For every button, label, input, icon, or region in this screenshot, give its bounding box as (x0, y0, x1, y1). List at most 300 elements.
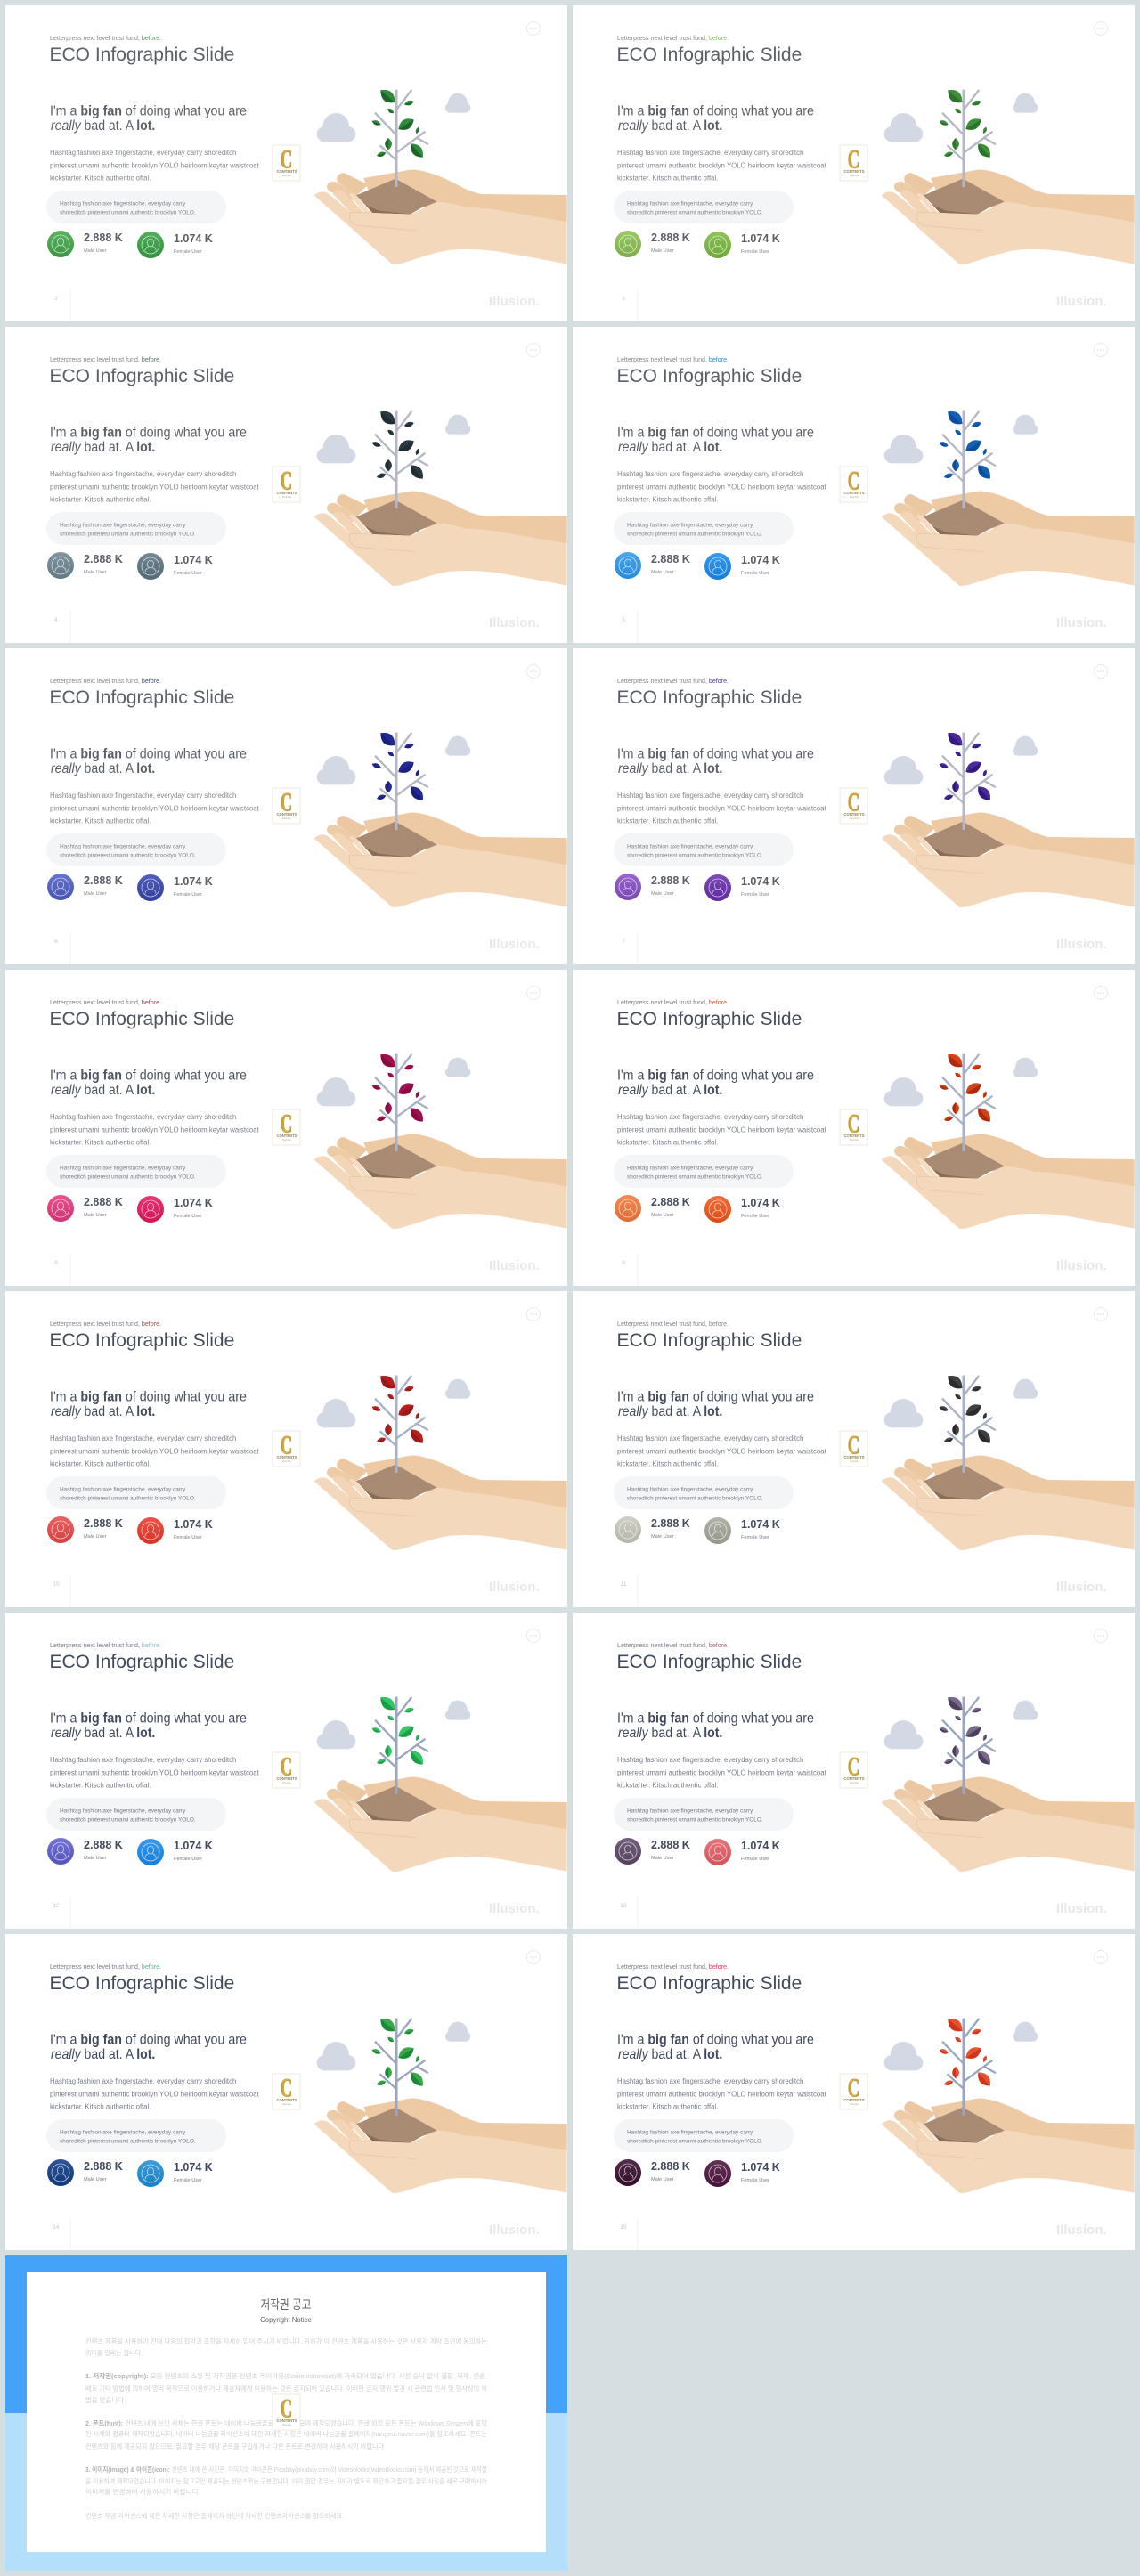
callout pill: shoreditch pinterest umami authentic brooklyn YOLO. (627, 210, 763, 215)
panel: slide 7 (573, 648, 1135, 964)
stat: female users: Female User (741, 1214, 770, 1219)
stat: female users (704, 553, 780, 580)
body text (50, 1756, 260, 1790)
footer divider (69, 289, 71, 321)
white notice sheet (27, 2272, 546, 2552)
body text: Hashtag fashion axe fingerstache, everyday carry shoreditch (617, 1113, 803, 1121)
illustration: sapling (940, 1697, 995, 1794)
small heading: Letterpress next level trust fund, before. (617, 35, 729, 42)
slide background (5, 648, 567, 964)
logo: Real.Star (850, 1782, 859, 1784)
body text (50, 1434, 260, 1467)
callout pill: Hashtag fashion axe fingerstache, everyday carry (627, 2130, 753, 2135)
stat: male users: Male User (84, 891, 107, 897)
headline: I'm a big fan of doing what you are (617, 1068, 814, 1084)
footer divider (637, 1254, 639, 1286)
logo: CONTENTS (276, 491, 297, 495)
callout pill: Hashtag fashion axe fingerstache, everyday carry (627, 1487, 753, 1492)
logo: CONTENTS (276, 169, 297, 174)
callout pill (46, 2119, 226, 2152)
notice title: 저작권 공고 (260, 2297, 312, 2312)
slide background (573, 1613, 1135, 1929)
stat: male users: 2.888 K (651, 2160, 690, 2173)
icon: menu dots (527, 664, 540, 679)
icon: clouds (317, 1701, 470, 1749)
logo: CONTENTS (843, 491, 865, 495)
illustration: sapling (940, 1054, 995, 1151)
title: ECO Infographic Slide (50, 1973, 234, 1994)
headline (617, 1389, 814, 1419)
stat: female users: 1.074 K (741, 875, 780, 888)
logo: Real.Star (850, 817, 859, 820)
icon: clouds (884, 1058, 1038, 1106)
font clause: 컨텐츠와 함께 제공되지 않으므로, 필요할 경우 해당 폰트를 구입하거나 다른 폰트로 변경하여 사용하시기 바랍니다. (86, 2442, 386, 2450)
stat: male users: Male User (84, 1534, 107, 1540)
footer divider (69, 932, 71, 964)
page number: 15 (620, 2224, 627, 2231)
stat: male users: 2.888 K (84, 1839, 123, 1851)
page number: 11 (621, 1581, 627, 1588)
brand mark: Illusion. (489, 1580, 540, 1595)
panel: slide 8 (5, 970, 567, 1286)
body text: pinterest umami authentic brooklyn YOLO heirloom keytar waistcoat (617, 1768, 827, 1777)
stat: female users: Female User (741, 1857, 770, 1862)
copyright clause (86, 2371, 487, 2404)
logo (840, 467, 867, 502)
stat: male users: Male User (651, 248, 674, 254)
logo (840, 1109, 867, 1145)
logo: C (848, 467, 859, 496)
icon: menu dots (527, 987, 540, 999)
body text: Hashtag fashion axe fingerstache, everyday carry shoreditch (50, 792, 236, 800)
headline: really bad at. A lot. (618, 439, 722, 455)
stat: female users: Female User (174, 1535, 202, 1540)
title: ECO Infographic Slide (50, 45, 234, 65)
illustration: hands with soil (314, 491, 567, 586)
slide background (5, 970, 567, 1286)
illustration: sapling (372, 733, 428, 830)
page number: 12 (53, 1903, 60, 1909)
headline (617, 103, 814, 134)
stat: male users: 2.888 K (84, 553, 123, 565)
panel: slide 10 (5, 1291, 567, 1607)
logo: C (281, 788, 292, 817)
headline: I'm a big fan of doing what you are (50, 1068, 247, 1084)
small heading: Letterpress next level trust fund, before. (617, 678, 729, 685)
callout pill: shoreditch pinterest umami authentic brooklyn YOLO. (60, 1496, 196, 1501)
illustration: sapling (372, 1376, 428, 1473)
body text (617, 792, 827, 825)
callout pill (614, 191, 794, 223)
icon: menu dots (527, 1629, 540, 1642)
headline (50, 2032, 247, 2062)
illustration: hands with soil (314, 1455, 567, 1550)
callout pill (46, 1155, 226, 1188)
icon: menu dots (1094, 1307, 1108, 1321)
stat: male users (47, 552, 123, 579)
callout pill: shoreditch pinterest umami authentic brooklyn YOLO. (60, 853, 196, 858)
footer divider (69, 1575, 71, 1607)
footer divider (637, 932, 639, 964)
logo (840, 788, 867, 824)
callout pill (46, 191, 226, 223)
title: ECO Infographic Slide (50, 366, 234, 386)
headline: I'm a big fan of doing what you are (50, 103, 247, 119)
stat: female users (704, 1839, 780, 1865)
stat: male users (615, 874, 690, 900)
illustration: hands with soil (314, 2098, 567, 2193)
callout pill: shoreditch pinterest umami authentic brooklyn YOLO. (627, 1816, 763, 1824)
illustration: hands with soil (314, 812, 567, 907)
body text: Hashtag fashion axe fingerstache, everyday carry shoreditch (617, 2077, 803, 2085)
footer divider (637, 611, 639, 643)
illustration: hands with soil (314, 169, 567, 264)
page number: 4 (54, 617, 58, 623)
headline: I'm a big fan of doing what you are (617, 746, 814, 762)
stat: male users: Male User (84, 248, 107, 254)
stat: male users (615, 2159, 690, 2186)
callout pill: shoreditch pinterest umami authentic brooklyn YOLO. (60, 1174, 196, 1181)
stat: female users: Female User (174, 571, 202, 576)
logo (840, 2074, 867, 2109)
callout pill: Hashtag fashion axe fingerstache, everyday carry (60, 1487, 186, 1492)
body text: kickstarter. Kitsch authentic offal. (50, 175, 151, 182)
page number: 14 (53, 2224, 60, 2231)
stat: female users: Female User (741, 892, 770, 898)
stat: male users: Male User (651, 570, 674, 575)
body text: Hashtag fashion axe fingerstache, everyday carry shoreditch (617, 1756, 803, 1764)
image and icon clause: 이미지를 변경하여 사용하시기 바랍니다. (86, 2487, 200, 2496)
callout pill: Hashtag fashion axe fingerstache, everyday carry (60, 1165, 186, 1172)
illustration: hands with soil (314, 1134, 567, 1229)
stat: female users (137, 1839, 213, 1865)
stat: male users: 2.888 K (651, 1196, 690, 1208)
callout pill: Hashtag fashion axe fingerstache, everyday carry (60, 522, 186, 529)
body text: kickstarter. Kitsch authentic offal. (617, 1460, 718, 1467)
logo (840, 1752, 867, 1788)
icon: menu dots (527, 21, 540, 36)
body text: pinterest umami authentic brooklyn YOLO heirloom keytar waistcoat (617, 2091, 827, 2098)
brand mark: Illusion. (1056, 615, 1107, 630)
image and icon clause: 3. 이미지(image) & 아이콘(icon): 컨텐츠 내에 쓴 사진은, 이미지와 아이콘은 Pixabay(pixabay.com)와 Videoblocks(videoblocks.com) 등에서 제공된 것으로 제작물 (86, 2465, 487, 2474)
stat: female users: 1.074 K (741, 1518, 780, 1531)
logo (840, 145, 867, 181)
callout pill: Hashtag fashion axe fingerstache, everyday carry (60, 2130, 186, 2135)
brand mark: Illusion. (1056, 2223, 1107, 2238)
illustration: sapling (940, 2019, 995, 2116)
illustration: sapling (940, 733, 995, 830)
headline (617, 746, 814, 776)
font clause: 2. 폰트(font): 컨텐츠 내에 쓰인 서체는 한글 폰트는 네이버 나눔글꼴로 제작되었으며 제작되었습니다. 한글 외의 모든 폰트는 Windows System에 포함 (86, 2418, 487, 2427)
illustration: sapling (372, 90, 428, 187)
headline: really bad at. A lot. (51, 439, 155, 455)
logo: Real.Star (850, 1139, 859, 1142)
callout pill (46, 512, 226, 545)
illustration: sapling (940, 1376, 995, 1473)
logo: CONTENTS (276, 812, 297, 817)
logo: C (281, 1431, 292, 1460)
brand mark: Illusion. (1056, 1901, 1107, 1916)
logo: Real.Star (850, 175, 859, 177)
title: ECO Infographic Slide (616, 1652, 802, 1672)
body text (50, 792, 260, 825)
brand mark: Illusion. (1056, 937, 1107, 952)
headline: really bad at. A lot. (51, 1725, 155, 1741)
headline: I'm a big fan of doing what you are (617, 2032, 814, 2048)
illustration: sapling (372, 2019, 428, 2116)
headline: I'm a big fan of doing what you are (617, 1711, 814, 1727)
body text (617, 1113, 827, 1147)
body text: pinterest umami authentic brooklyn YOLO heirloom keytar waistcoat (617, 1448, 827, 1455)
image and icon clause: 을 이용하여 제작되었습니다. 이미지는 참고교안 제공되는 컨텐츠와는 구분합니다. 이미 결합 경우는 귀하가 별도로 확인하고 필요할 경우 사진을 새로 구매하시어 (86, 2476, 487, 2485)
logo: Real.Star (282, 817, 291, 820)
body text: Hashtag fashion axe fingerstache, everyday carry shoreditch (50, 149, 236, 157)
logo (840, 1431, 867, 1467)
headline: really bad at. A lot. (618, 760, 722, 776)
headline: really bad at. A lot. (618, 2046, 722, 2062)
stat: male users (47, 231, 123, 257)
body text: kickstarter. Kitsch authentic offal. (50, 817, 151, 825)
stat: female users (137, 874, 213, 901)
stat: male users: 2.888 K (84, 232, 123, 244)
body text: pinterest umami authentic brooklyn YOLO heirloom keytar waistcoat (50, 805, 260, 812)
footer divider (69, 1254, 71, 1286)
body text (50, 470, 260, 504)
small heading: Letterpress next level trust fund, before. (617, 1321, 729, 1328)
footer divider (69, 1897, 71, 1929)
logo: Real.Star (282, 175, 291, 177)
headline: really bad at. A lot. (618, 118, 722, 134)
body text: Hashtag fashion axe fingerstache, everyday carry shoreditch (50, 2077, 236, 2085)
body text: pinterest umami authentic brooklyn YOLO heirloom keytar waistcoat (617, 483, 827, 492)
slide background (573, 5, 1135, 321)
callout pill: shoreditch pinterest umami authentic brooklyn YOLO. (60, 531, 196, 538)
stat: male users: 2.888 K (84, 2160, 123, 2173)
stat: male users: 2.888 K (84, 1196, 123, 1208)
headline (617, 425, 814, 455)
illustration: sapling (372, 1697, 428, 1794)
stat: male users (47, 1838, 123, 1865)
small heading: Letterpress next level trust fund, before. (617, 999, 729, 1006)
stat: male users: Male User (84, 1856, 107, 1861)
callout pill: shoreditch pinterest umami authentic brooklyn YOLO. (627, 531, 763, 538)
font clause (86, 2418, 487, 2450)
callout pill: shoreditch pinterest umami authentic brooklyn YOLO. (60, 210, 196, 215)
blue header band (5, 2255, 567, 2413)
body text: kickstarter. Kitsch authentic offal. (617, 817, 718, 825)
stat: male users (615, 1838, 690, 1865)
stat: male users: 2.888 K (84, 874, 123, 887)
logo: CONTENTS (843, 2098, 865, 2102)
body text: pinterest umami authentic brooklyn YOLO heirloom keytar waistcoat (617, 805, 827, 812)
logo: C (848, 1431, 859, 1460)
headline: I'm a big fan of doing what you are (617, 425, 814, 441)
small heading: Letterpress next level trust fund, before. (50, 678, 161, 685)
stat: female users (704, 1196, 780, 1223)
callout pill (46, 1476, 226, 1509)
headline: really bad at. A lot. (618, 1082, 722, 1098)
stat: female users: 1.074 K (741, 2161, 780, 2174)
small heading: Letterpress next level trust fund, before. (50, 1642, 161, 1649)
title: ECO Infographic Slide (616, 1009, 802, 1029)
callout pill: shoreditch pinterest umami authentic brooklyn YOLO. (60, 2139, 196, 2144)
illustration: sapling (372, 1054, 428, 1151)
logo: CONTENTS (276, 1776, 297, 1781)
headline: I'm a big fan of doing what you are (50, 1711, 247, 1727)
body text: Hashtag fashion axe fingerstache, everyday carry shoreditch (50, 1756, 236, 1764)
callout pill (614, 1155, 794, 1188)
logo: CONTENTS (276, 2418, 297, 2423)
logo: Real.Star (282, 1460, 291, 1463)
logo: C (848, 145, 859, 175)
illustration: hands with soil (882, 1455, 1135, 1550)
stat: male users: 2.888 K (651, 1839, 690, 1851)
body text: pinterest umami authentic brooklyn YOLO heirloom keytar waistcoat (617, 1125, 827, 1134)
page number: 3 (622, 296, 625, 302)
panel: copyright notice (5, 2255, 567, 2571)
light blue lower band (5, 2413, 567, 2571)
stat: male users: Male User (651, 2177, 674, 2182)
footer divider (637, 1897, 639, 1929)
stat: female users (137, 2160, 213, 2187)
body text (617, 1756, 827, 1790)
body text: pinterest umami authentic brooklyn YOLO heirloom keytar waistcoat (50, 483, 260, 492)
stat: female users: 1.074 K (741, 554, 780, 566)
brand mark: Illusion. (489, 2223, 540, 2238)
stat: male users (47, 1516, 123, 1543)
headline: really bad at. A lot. (51, 1082, 155, 1098)
brand mark: Illusion. (489, 1901, 540, 1916)
icon: menu dots (1094, 1950, 1108, 1964)
icon: menu dots (1094, 344, 1108, 356)
logo: C (848, 788, 859, 817)
stat: male users (615, 231, 690, 257)
logo: CONTENTS (843, 812, 865, 817)
logo: Real.Star (282, 2424, 291, 2426)
logo: CONTENTS (843, 169, 865, 174)
logo: C (848, 1109, 859, 1139)
callout pill: Hashtag fashion axe fingerstache, everyday carry (627, 522, 753, 529)
headline: really bad at. A lot. (618, 1725, 722, 1741)
stat: female users: 1.074 K (174, 1840, 213, 1852)
stat: female users: 1.074 K (174, 232, 213, 245)
icon: clouds (317, 2022, 470, 2070)
body text: Hashtag fashion axe fingerstache, everyday carry shoreditch (50, 470, 236, 478)
callout pill (614, 512, 794, 545)
logo: Real.Star (850, 1460, 859, 1463)
body text (50, 2077, 260, 2110)
logo (273, 2074, 300, 2109)
icon: clouds (317, 93, 470, 142)
stat: male users: 2.888 K (651, 232, 690, 244)
title: ECO Infographic Slide (616, 1973, 802, 1994)
logo: Real.Star (850, 2103, 859, 2106)
slide background (5, 5, 567, 321)
page number: 9 (622, 1260, 625, 1266)
stat: male users: 2.888 K (84, 1517, 123, 1530)
body text: kickstarter. Kitsch authentic offal. (50, 1781, 151, 1790)
headline: really bad at. A lot. (51, 2046, 155, 2062)
panel: slide 11 (573, 1291, 1135, 1607)
intro paragraph: 의미를 알리는 합니다. (86, 2348, 142, 2357)
icon: clouds (317, 415, 470, 463)
stat: male users (615, 1195, 690, 1222)
body text: pinterest umami authentic brooklyn YOLO heirloom keytar waistcoat (617, 162, 827, 169)
slide background (573, 1934, 1135, 2250)
headline: really bad at. A lot. (51, 1403, 155, 1419)
logo (273, 2394, 300, 2430)
illustration: hands with soil (314, 1776, 567, 1872)
body text: pinterest umami authentic brooklyn YOLO heirloom keytar waistcoat (50, 2091, 260, 2098)
headline: I'm a big fan of doing what you are (617, 103, 814, 119)
illustration: hands with soil (882, 1776, 1135, 1872)
stat: female users: 1.074 K (741, 232, 780, 245)
icon: menu dots (1094, 1629, 1108, 1642)
stat: female users (137, 232, 213, 258)
page number: 7 (622, 939, 625, 945)
stat: male users: Male User (651, 1534, 674, 1540)
body text (617, 1434, 827, 1467)
panel: slide 6 (5, 648, 567, 964)
icon: menu dots (527, 344, 540, 356)
footer divider (69, 2218, 71, 2250)
page number: 13 (620, 1903, 627, 1909)
callout pill: Hashtag fashion axe fingerstache, everyday carry (627, 1165, 753, 1172)
body text: Hashtag fashion axe fingerstache, everyday carry shoreditch (617, 1434, 803, 1442)
title: ECO Infographic Slide (616, 45, 802, 65)
footer divider (69, 611, 71, 643)
logo: CONTENTS (276, 1455, 297, 1459)
logo: Real.Star (282, 1782, 291, 1784)
intro paragraph (86, 2336, 487, 2357)
brand mark: Illusion. (489, 937, 540, 952)
title: ECO Infographic Slide (616, 687, 802, 708)
image and icon clause (86, 2465, 487, 2496)
stat: male users (47, 874, 123, 900)
stat: female users: 1.074 K (174, 1197, 213, 1209)
callout pill (46, 833, 226, 866)
notice subtitle: Copyright Notice (260, 2316, 312, 2324)
headline (50, 425, 247, 455)
body text: kickstarter. Kitsch authentic offal. (617, 1138, 718, 1147)
callout pill: shoreditch pinterest umami authentic brooklyn YOLO. (627, 853, 763, 858)
brand mark: Illusion. (489, 294, 540, 309)
footer divider (637, 289, 639, 321)
stat: male users (615, 1516, 690, 1543)
icon: menu dots (1094, 664, 1108, 679)
stat: male users: Male User (84, 570, 107, 575)
illustration: hands with soil (882, 169, 1135, 264)
icon: clouds (884, 2022, 1038, 2070)
headline: I'm a big fan of doing what you are (50, 746, 247, 762)
stat: male users: Male User (651, 1213, 674, 1218)
callout pill: Hashtag fashion axe fingerstache, everyday carry (60, 844, 186, 849)
stat: male users: Male User (84, 1213, 107, 1218)
icon: clouds (884, 1701, 1038, 1749)
brand mark: Illusion. (489, 1258, 540, 1273)
body text: kickstarter. Kitsch authentic offal. (617, 175, 718, 182)
logo: CONTENTS (276, 2098, 297, 2102)
stat: female users: Female User (741, 1535, 770, 1540)
callout pill: Hashtag fashion axe fingerstache, everyday carry (627, 201, 753, 207)
illustration: sapling (940, 411, 995, 508)
illustration: sapling (372, 411, 428, 508)
callout pill (46, 1798, 226, 1831)
callout pill: Hashtag fashion axe fingerstache, everyday carry (60, 201, 186, 207)
logo (273, 145, 300, 181)
stat: female users: Female User (174, 1857, 202, 1862)
body text: Hashtag fashion axe fingerstache, everyday carry shoreditch (617, 470, 803, 478)
